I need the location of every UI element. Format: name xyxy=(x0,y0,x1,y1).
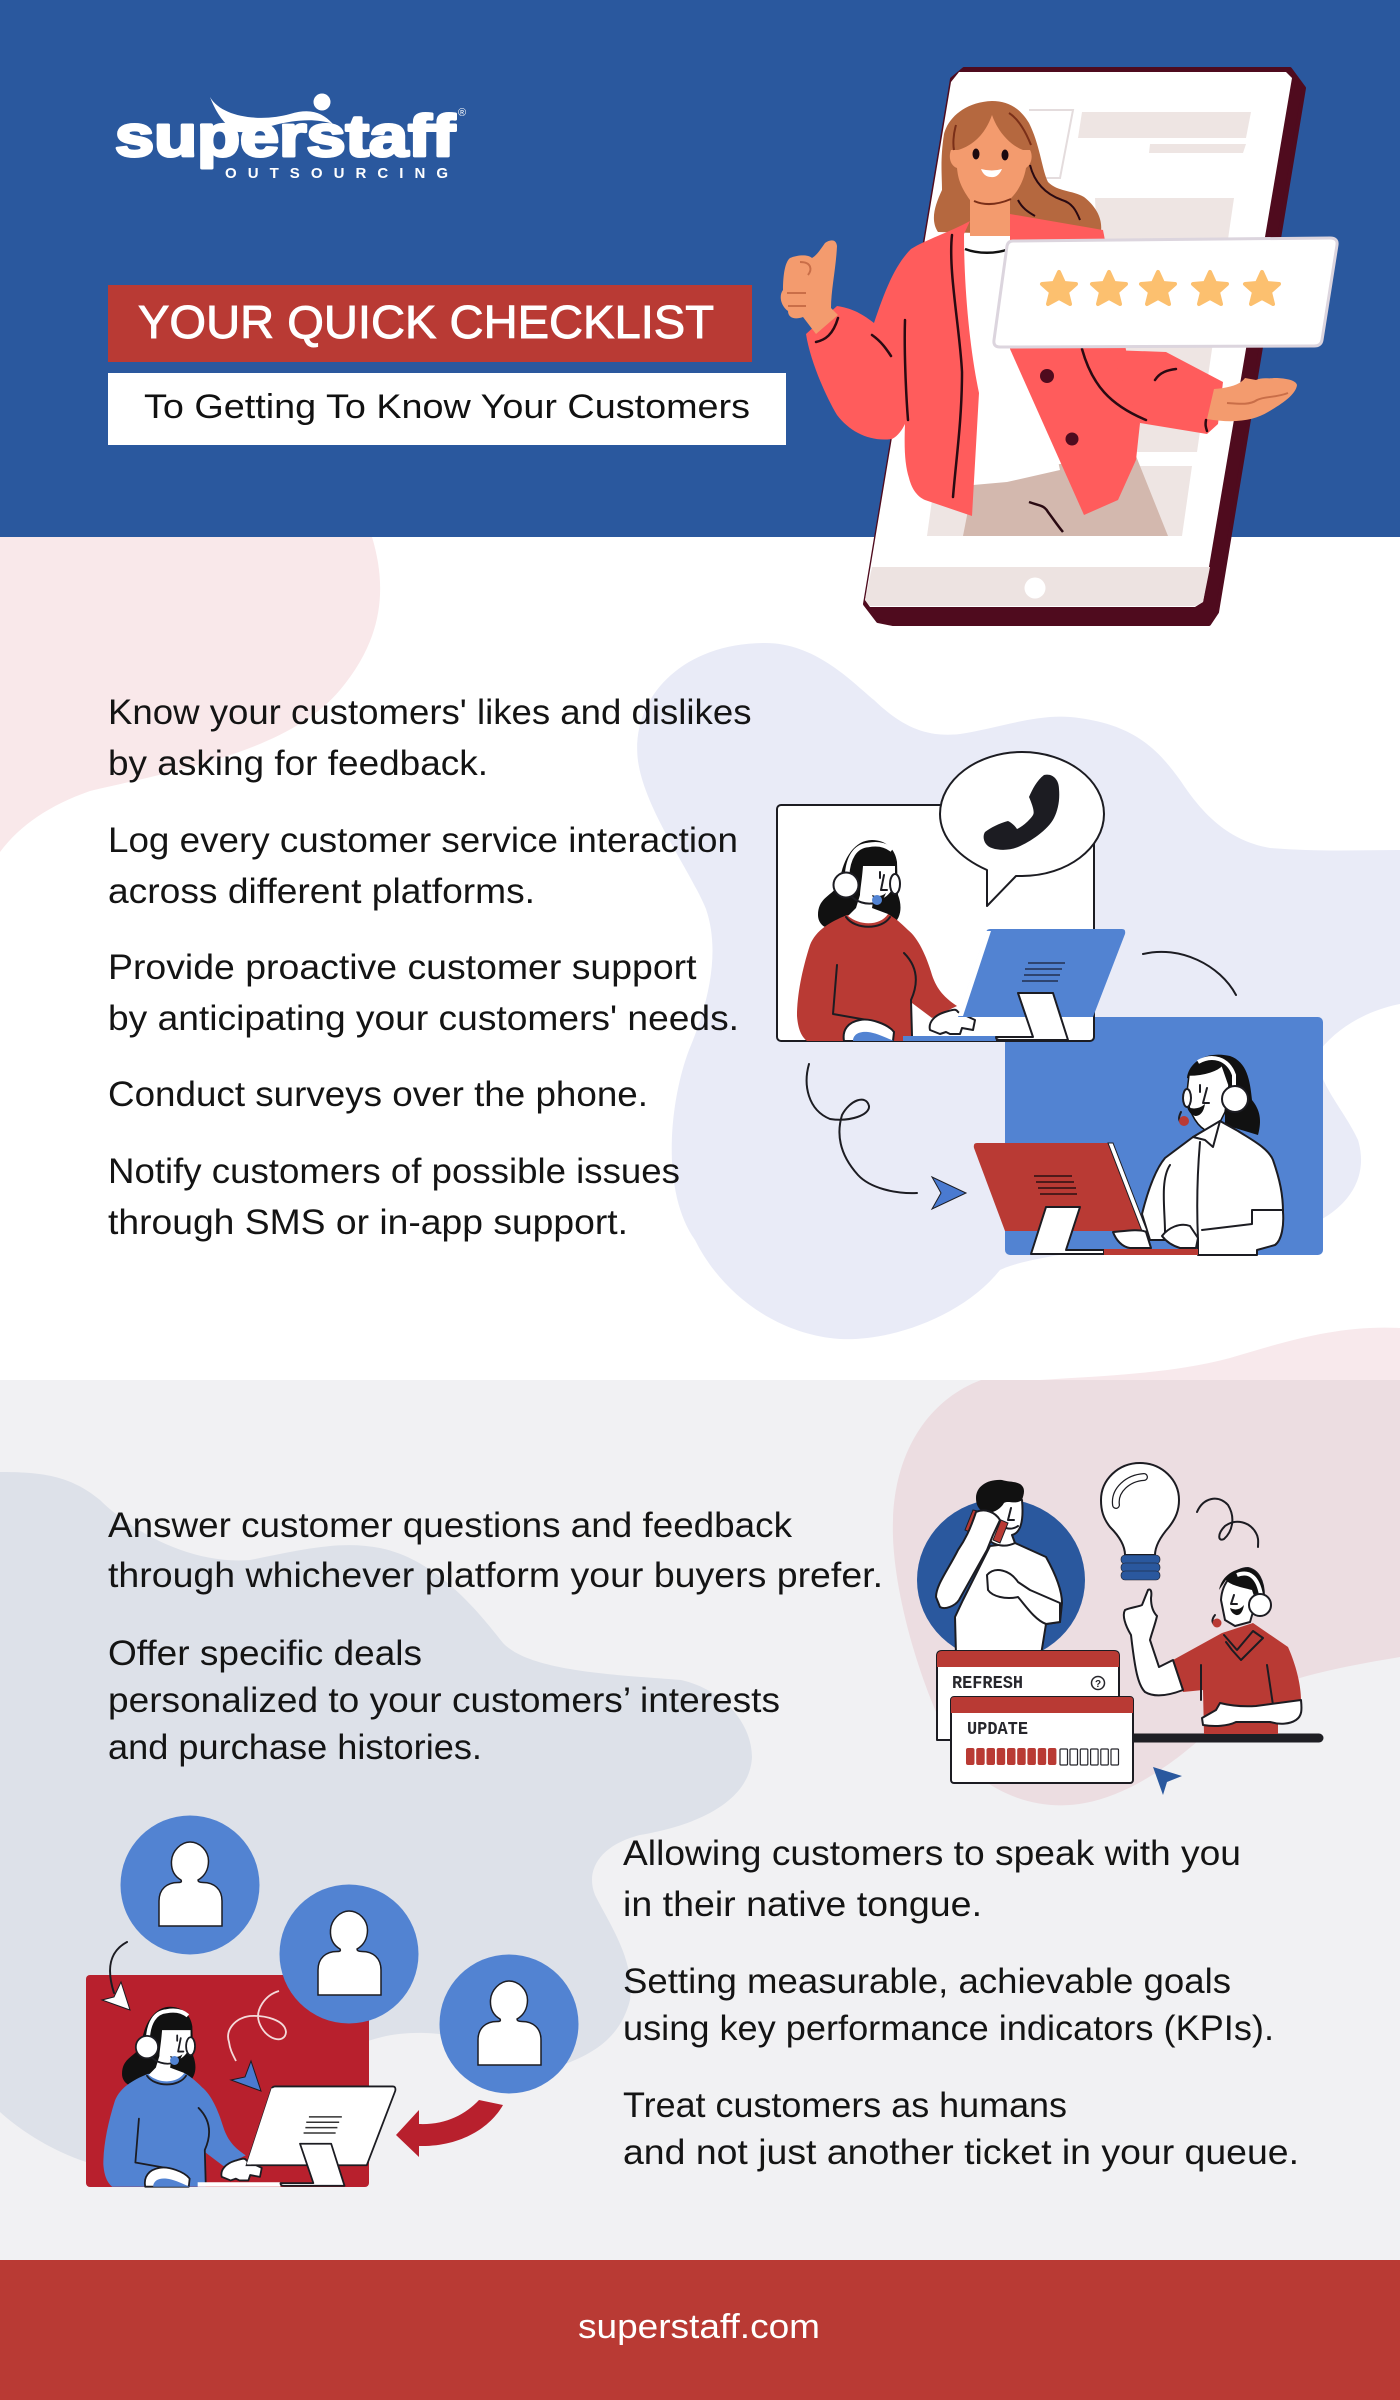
white swirl xyxy=(228,1991,286,2061)
header band xyxy=(0,0,1400,537)
customer circle 2 xyxy=(280,1884,418,2024)
logo: ® xyxy=(458,107,466,119)
subtitle banner xyxy=(108,373,786,445)
background blob: pink top-left xyxy=(0,537,380,852)
phone body xyxy=(865,69,1304,624)
white arrowhead xyxy=(102,1982,130,2010)
customer circle 3 xyxy=(440,1954,578,2094)
swirl connector xyxy=(807,1064,917,1193)
update card xyxy=(951,1697,1133,1783)
rating card xyxy=(994,238,1337,347)
checklist text: second group xyxy=(108,1505,883,1767)
checklist text: third group xyxy=(623,1833,1299,2172)
checklist text: third group: and not just another ticket in your queue. xyxy=(623,2132,1299,2172)
refresh card: ? xyxy=(1095,1679,1101,1690)
blue panel xyxy=(1005,1017,1323,1255)
lower section background xyxy=(0,1380,1400,2260)
progress bar xyxy=(966,1748,1056,1765)
blue circle xyxy=(917,1499,1085,1661)
logo xyxy=(115,94,466,182)
title banner xyxy=(108,285,752,362)
checklist text: second group: personalized to your customers’ interests xyxy=(108,1680,780,1720)
checklist text: first group: through SMS or in-app support. xyxy=(108,1202,628,1242)
blue arrowhead xyxy=(932,1177,966,1209)
checklist text: first group: across different platforms. xyxy=(108,871,535,911)
call center illustration xyxy=(777,752,1323,1255)
background blob: blue grey xyxy=(0,1472,752,2162)
pants xyxy=(963,456,1168,536)
hair xyxy=(934,101,1101,236)
phone screen xyxy=(865,72,1292,607)
agent in white shirt xyxy=(1142,1055,1283,1255)
checklist text: second group: and purchase histories. xyxy=(108,1727,482,1767)
five stars xyxy=(1042,272,1279,304)
checklist text: first group: Know your customers' likes and dislikes xyxy=(108,692,752,732)
swirl xyxy=(1197,1499,1258,1547)
woman left panel and sleeve xyxy=(806,221,979,516)
desk xyxy=(1130,1734,1319,1742)
customer circle 1 xyxy=(120,1816,260,1954)
checklist text: third group: Allowing customers to speak with you xyxy=(623,1833,1241,1873)
blue arrowhead xyxy=(231,2061,261,2091)
title banner: YOUR QUICK CHECKLIST xyxy=(138,296,714,348)
white panel xyxy=(777,805,1094,1041)
refresh card xyxy=(937,1651,1119,1740)
checklist text: first group: Log every customer service interaction xyxy=(108,820,738,860)
checklist text: first group xyxy=(108,692,752,1242)
checklist text: first group: Provide proactive customer support xyxy=(108,947,697,987)
checklist text: second group: Answer customer questions and feedback xyxy=(108,1505,792,1545)
connector curve xyxy=(110,1942,127,1993)
update card: UPDATE xyxy=(967,1720,1028,1740)
man on phone xyxy=(936,1480,1062,1655)
red monitor xyxy=(974,1143,1198,1255)
woman right arm and hand xyxy=(1110,350,1223,434)
neck and face xyxy=(950,115,1032,236)
checklist text: first group: Notify customers of possible issues xyxy=(108,1151,680,1191)
illustration: agent and customers xyxy=(86,1816,578,2187)
checklist text: third group: in their native tongue. xyxy=(623,1884,982,1924)
speech bubble with phone xyxy=(940,752,1104,906)
agent in blue sweater xyxy=(103,2007,395,2187)
illustration: support with lightbulb xyxy=(917,1463,1319,1795)
thumbs up hand xyxy=(781,240,838,334)
agent in red sweater xyxy=(797,840,1125,1041)
logo: superstaff xyxy=(115,104,456,169)
red curved arrow xyxy=(396,2100,503,2157)
connector arc xyxy=(1143,952,1236,995)
checklist text: third group: using key performance indicators (KPIs). xyxy=(623,2008,1274,2048)
checklist text: second group: through whichever platform your buyers prefer. xyxy=(108,1555,883,1595)
footer band: superstaff.com xyxy=(578,2308,820,2346)
lightbulb xyxy=(1101,1463,1179,1580)
refresh card: REFRESH xyxy=(952,1674,1023,1694)
background blob: pink in lower section xyxy=(893,1380,1400,1806)
checklist text: first group: by anticipating your customers' needs. xyxy=(108,998,739,1038)
subtitle banner: To Getting To Know Your Customers xyxy=(144,388,750,426)
shirt xyxy=(966,234,1060,485)
cursor arrow xyxy=(1153,1767,1182,1795)
jacket seams xyxy=(816,235,1207,497)
hero illustration: phone with woman and rating xyxy=(781,69,1337,624)
checklist text: first group: Conduct surveys over the phone. xyxy=(108,1074,648,1114)
checklist text: second group: Offer specific deals xyxy=(108,1633,422,1673)
background blob: pink over white xyxy=(1040,1328,1400,1380)
red panel xyxy=(86,1975,369,2187)
background blob: lavender xyxy=(637,643,1400,1339)
checklist text: first group: by asking for feedback. xyxy=(108,743,488,783)
logo: OUTSOURCING xyxy=(225,165,448,182)
face details xyxy=(972,148,980,160)
checklist text: third group: Treat customers as humans xyxy=(623,2085,1067,2125)
agent man in red shirt xyxy=(1124,1568,1301,1734)
checklist text: third group: Setting measurable, achievable goals xyxy=(623,1961,1231,2001)
footer band xyxy=(0,2260,1400,2400)
